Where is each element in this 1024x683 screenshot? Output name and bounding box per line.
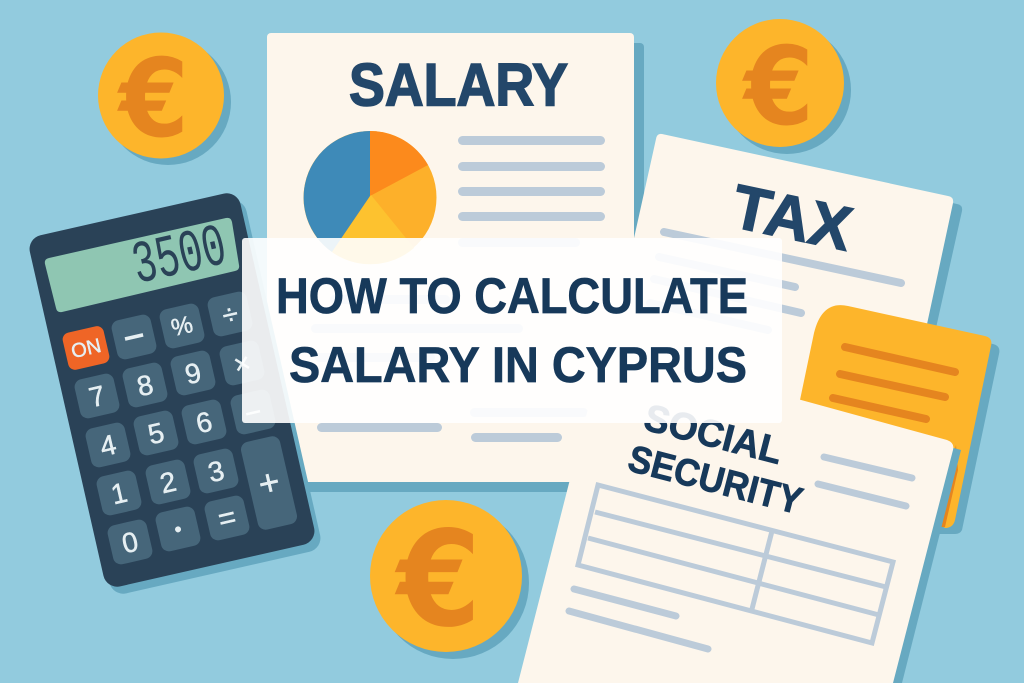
calculator keys: 5 — [145, 417, 167, 450]
icon: euro coin top left: € — [116, 37, 189, 162]
text lines: tax details — [650, 232, 901, 330]
calculator keys: 8 — [134, 369, 156, 402]
calculator keys: 9 — [182, 357, 204, 390]
calculator keys — [61, 290, 299, 566]
calculator keys: 0 — [119, 526, 141, 559]
icon: euro coin top right: € — [741, 25, 814, 150]
icon: euro coin bottom — [370, 500, 529, 659]
title: HOW TO CALCULATE — [276, 268, 748, 324]
text lines: notes — [569, 457, 912, 649]
calculator keys: 6 — [193, 406, 215, 439]
calculator keys: − — [242, 396, 265, 429]
table — [578, 485, 893, 643]
panel: tax document — [587, 134, 962, 450]
chart: salary pie — [304, 131, 436, 264]
calculator keys: = — [215, 500, 239, 537]
calculator keys: × — [231, 347, 254, 380]
calculator display: 3500 — [126, 214, 233, 302]
panel: sticky note — [800, 305, 999, 534]
icon: euro coin top left — [98, 32, 231, 165]
title: SALARY IN CYPRUS — [289, 337, 747, 393]
heading: tax: TAX — [726, 172, 858, 265]
icon: calculator — [27, 191, 323, 596]
title banner — [242, 238, 782, 423]
heading: social security: SECURITY — [624, 438, 807, 523]
calculator keys: ON — [69, 335, 103, 363]
heading: social security: SOCIAL — [640, 397, 787, 473]
calculator keys: 3 — [205, 455, 227, 488]
calculator keys: − — [119, 314, 149, 359]
title — [276, 268, 748, 393]
calculator keys: 2 — [157, 466, 179, 499]
calculator keys: ÷ — [219, 298, 241, 331]
panel: salary document — [267, 33, 644, 492]
heading: social security — [624, 397, 807, 523]
calculator keys: 7 — [86, 380, 108, 413]
calculator display — [45, 214, 239, 312]
calculator keys: • — [172, 518, 184, 541]
calculator keys: 4 — [97, 429, 119, 462]
heading: salary: SALARY — [349, 52, 568, 118]
calculator keys: % — [169, 311, 196, 342]
calculator keys: + — [254, 460, 284, 505]
text lines: note — [833, 347, 955, 419]
icon: euro coin bottom: € — [394, 503, 481, 657]
icon: euro coin top right — [716, 19, 851, 154]
panel: social security document — [518, 346, 961, 683]
calculator keys: 1 — [108, 477, 130, 510]
text lines: salary details — [311, 136, 605, 442]
